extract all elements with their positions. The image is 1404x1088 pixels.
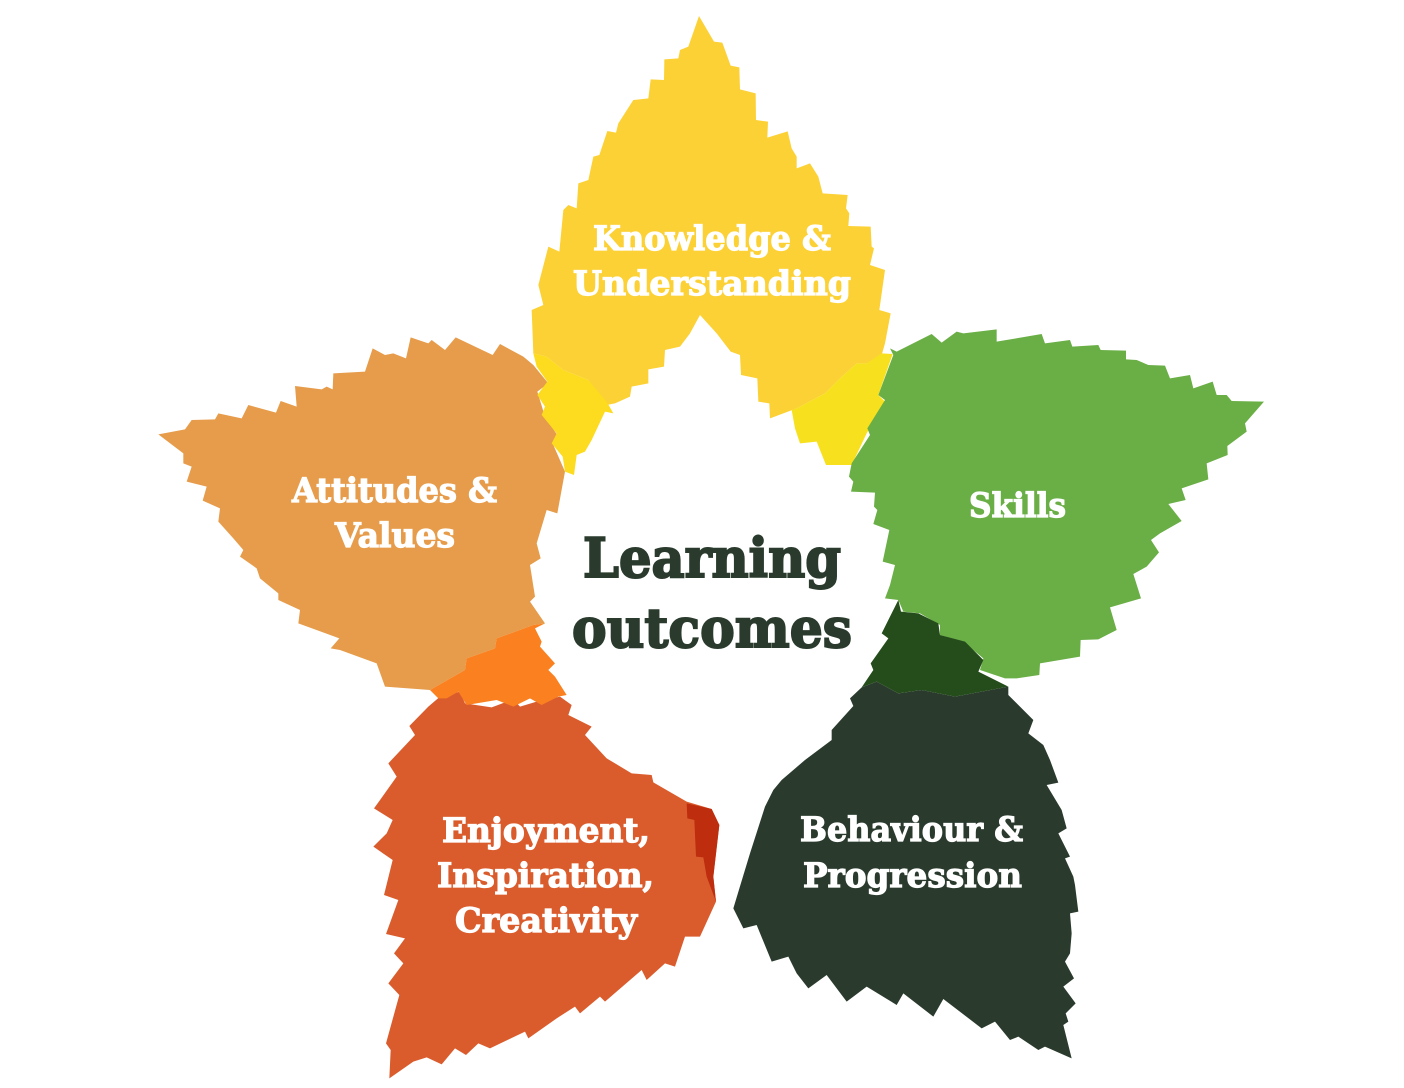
leaf: skills (green) xyxy=(849,329,1264,678)
central title: learning outcomes: outcomes xyxy=(572,596,852,660)
label: skills: Skills xyxy=(969,486,1066,526)
overlap: yellow and green leaves xyxy=(792,353,893,465)
label: behaviour and progression: Progression xyxy=(803,856,1022,896)
label: knowledge and understanding: Understanding xyxy=(573,264,851,304)
label: attitudes and values xyxy=(291,471,497,556)
label: enjoyment, inspiration, creativity: Enjoyment, xyxy=(442,811,650,851)
label: knowledge and understanding xyxy=(573,219,851,304)
label: attitudes and values: Values xyxy=(334,516,455,556)
leaf: enjoyment, inspiration, creativity (red-orange) xyxy=(373,692,719,1078)
overlap: orange and red leaves xyxy=(430,623,567,707)
overlap: yellow and orange leaves xyxy=(533,353,613,475)
label: behaviour and progression: Behaviour & xyxy=(800,810,1023,850)
label: enjoyment, inspiration, creativity: Creativity xyxy=(455,901,638,941)
leaf: attitudes and values (orange) xyxy=(158,337,565,690)
label: enjoyment, inspiration, creativity: Inspiration, xyxy=(437,856,654,896)
label: attitudes and values: Attitudes & xyxy=(291,471,497,511)
label: behaviour and progression xyxy=(800,810,1023,896)
label: knowledge and understanding: Knowledge & xyxy=(593,219,831,259)
overlap: green and dark leaves xyxy=(862,600,1008,697)
central title: learning outcomes: Learning xyxy=(583,526,841,590)
leaf: knowledge and understanding (yellow) xyxy=(532,16,891,418)
central title: learning outcomes xyxy=(572,526,852,660)
overlap: red leaf tip xyxy=(687,803,719,902)
leaf: behaviour and progression (dark green) xyxy=(733,682,1078,1058)
label: enjoyment, inspiration, creativity xyxy=(437,811,654,941)
